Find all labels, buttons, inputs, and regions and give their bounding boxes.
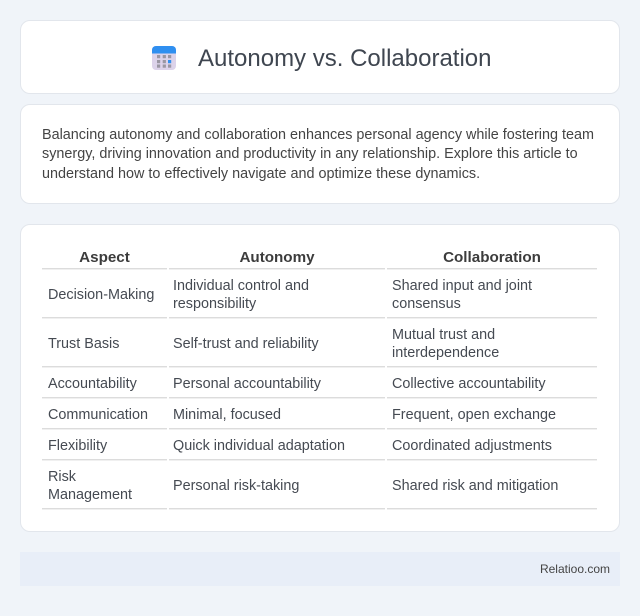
row: Trust Basis: Mutual trust and: [392, 327, 495, 343]
row: Decision-Making: responsibility: [173, 296, 256, 312]
row: Communication: Minimal, focused: [173, 407, 281, 423]
panel: comparison table: [20, 224, 620, 532]
row: Trust Basis: interdependence: [392, 345, 499, 361]
row: Risk Management: Risk: [48, 469, 76, 485]
row: Risk Management: Shared risk and mitigation: [392, 478, 558, 494]
intro text: synergy, driving innovation and productivity in any relationship. Explore this article to: [42, 146, 578, 162]
row: Decision-Making: [48, 278, 532, 312]
panel: title card: [20, 20, 620, 94]
row: Accountability: Personal accountability: [173, 376, 321, 392]
row: Risk Management: Personal risk-taking: [173, 478, 299, 494]
row: Flexibility: [48, 438, 552, 454]
row: Communication: [48, 407, 556, 423]
row: Accountability: [48, 376, 546, 392]
header: Collaboration: Collaboration: [443, 249, 541, 266]
icon: calendar: [152, 46, 176, 70]
row: Communication: Frequent, open exchange: [392, 407, 556, 423]
header: Autonomy: Autonomy: [239, 249, 315, 266]
intro text: understand how to effectively navigate and optimize these dynamics.: [42, 166, 480, 182]
row: Flexibility: Quick individual adaptation: [173, 438, 345, 454]
header: Aspect: Aspect: [79, 249, 130, 266]
row: Trust Basis: Self-trust and reliability: [173, 336, 319, 352]
intro text: [42, 127, 594, 182]
footer text: Relatioo.com: [540, 562, 610, 576]
row: Communication: Communication: [48, 407, 148, 423]
row: Decision-Making: consensus: [392, 296, 461, 312]
row: Flexibility: Flexibility: [48, 438, 107, 454]
row: Decision-Making: Shared input and joint: [392, 278, 532, 294]
comparison table: [42, 249, 597, 510]
row: Risk Management: [48, 469, 558, 503]
row: Accountability: Accountability: [48, 376, 137, 392]
row: Risk Management: Management: [48, 487, 132, 503]
row: Decision-Making: Individual control and: [173, 278, 309, 294]
intro text: Balancing autonomy and collaboration enhances personal agency while fostering team: [42, 127, 594, 143]
row: Trust Basis: [48, 327, 499, 361]
row: Flexibility: Coordinated adjustments: [392, 438, 552, 454]
panel: intro: [20, 104, 620, 204]
row: Trust Basis: Trust Basis: [48, 336, 119, 352]
footer bar: [20, 552, 620, 586]
title: Autonomy vs. Collaboration: [198, 45, 491, 72]
row: Decision-Making: Decision-Making: [48, 287, 154, 303]
row: Accountability: Collective accountability: [392, 376, 546, 392]
